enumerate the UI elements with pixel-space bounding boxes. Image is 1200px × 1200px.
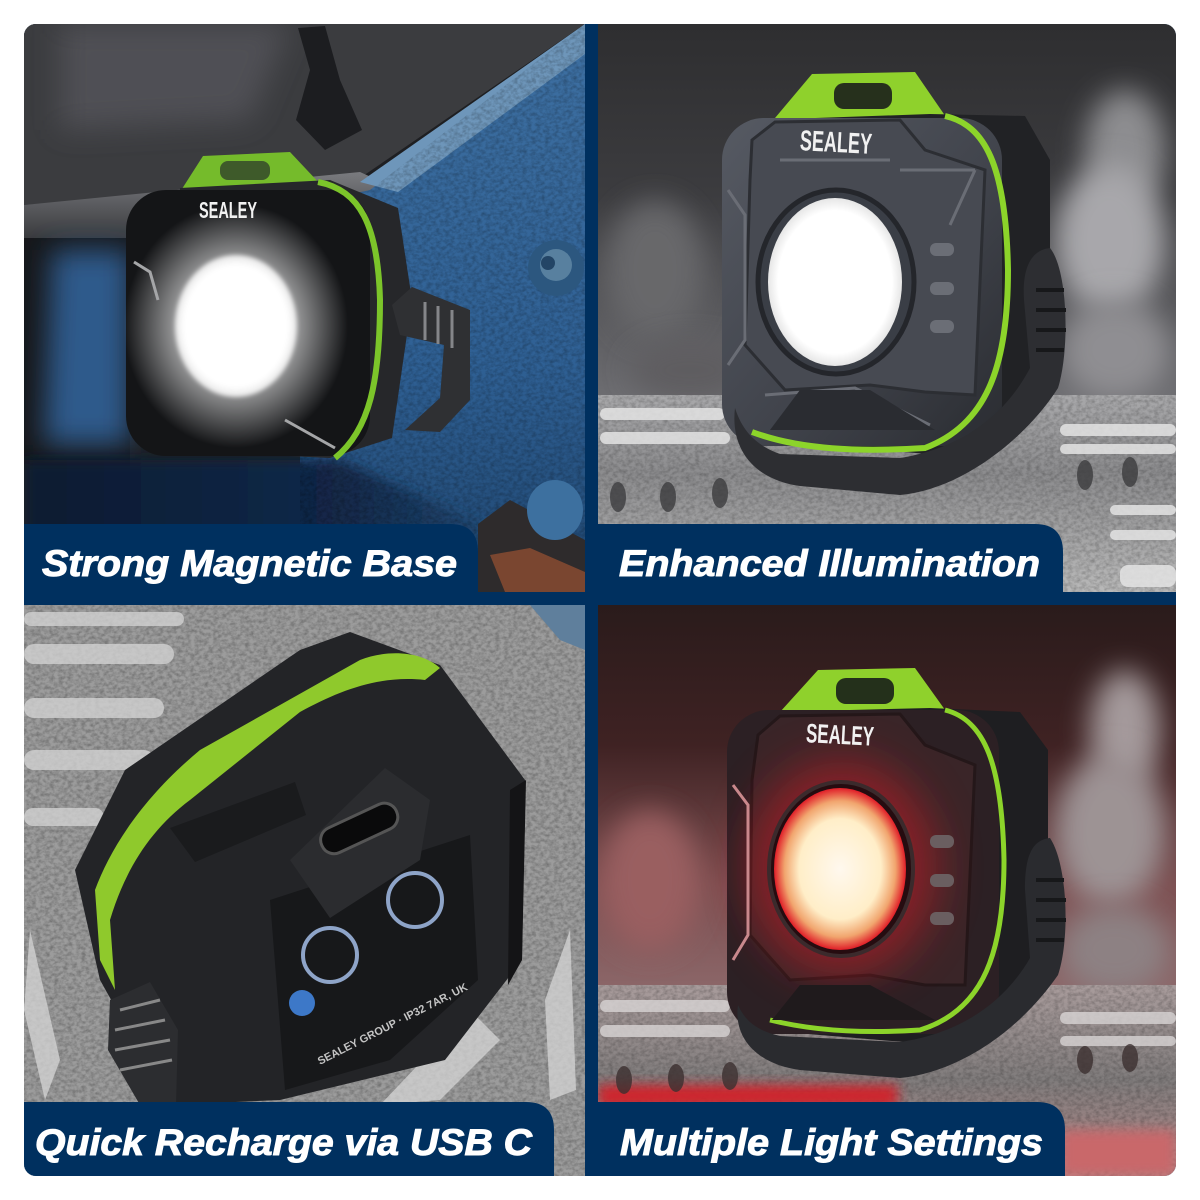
icon: work light on magnetic base: SEALEY bbox=[199, 197, 257, 223]
clip bbox=[392, 287, 470, 432]
icon: work light on stand bbox=[722, 72, 1066, 495]
icon: rear of light with USB C port: SEALEY GROUP · IP32 7AR, UK bbox=[316, 981, 470, 1068]
red-lit diamond plate floor bbox=[598, 985, 1176, 1176]
caption: multiple light settings bbox=[586, 1102, 1065, 1176]
panel: quick recharge photo bbox=[24, 605, 585, 1176]
caption: strong magnetic base bbox=[24, 524, 478, 592]
rubber port flap bbox=[170, 782, 306, 862]
caption: enhanced illumination bbox=[598, 524, 1063, 592]
caption: multiple light settings: Multiple Light Settings bbox=[620, 1122, 1043, 1163]
panel: enhanced illumination photo bbox=[598, 24, 1176, 592]
caption: enhanced illumination: Enhanced Illumination bbox=[619, 543, 1040, 584]
icon: work light with red ring: SEALEY bbox=[805, 718, 875, 752]
icon: work light on magnetic base bbox=[124, 152, 470, 458]
diamond plate floor bbox=[598, 395, 1176, 592]
caption: strong magnetic base: Strong Magnetic Base bbox=[42, 543, 457, 584]
panel: strong magnetic base photo bbox=[24, 24, 585, 592]
caption: quick recharge via USB C bbox=[24, 1102, 554, 1176]
icon: work light on stand: SEALEY bbox=[799, 125, 873, 161]
caption: quick recharge via USB C: Quick Recharge via USB C bbox=[35, 1122, 533, 1163]
rust patch bbox=[478, 500, 585, 592]
stand bbox=[737, 838, 1066, 1078]
icon: work light with red ring bbox=[727, 668, 1066, 1078]
stand bbox=[734, 248, 1066, 495]
panel: multiple light settings photo bbox=[598, 605, 1176, 1176]
bolts bbox=[528, 240, 584, 296]
icon: rear of light with USB C port bbox=[75, 632, 526, 1105]
